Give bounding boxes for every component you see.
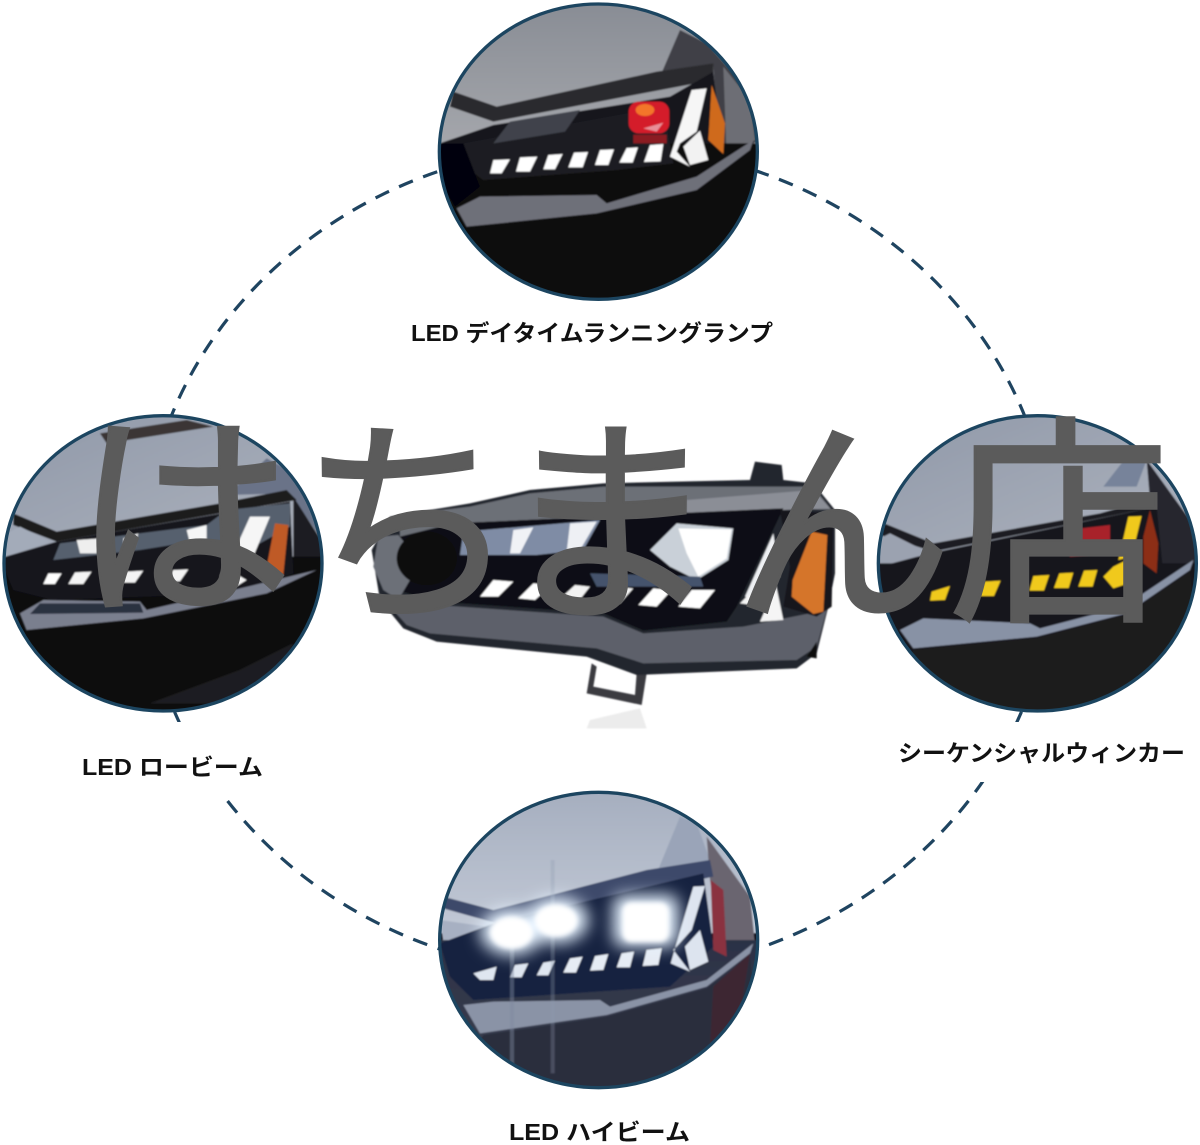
photo: bottom circle, high beam [438, 790, 760, 1090]
label: sequential turn signal: シーケンシャルウィンカー [898, 740, 1185, 766]
watermark: はちまん店 [72, 398, 1170, 652]
photo: top circle, daytime running lamp [438, 2, 759, 301]
dashed connecting ring [143, 145, 1053, 975]
photo: centre headlight [372, 462, 835, 728]
mounting bracket [587, 663, 647, 705]
amber marker [267, 523, 288, 575]
photo: right circle, sequential turn signal [876, 414, 1198, 713]
label: low beam: LED ロービーム [82, 754, 263, 780]
amber side marker [792, 532, 827, 614]
label: high beam: LED ハイビーム [509, 1119, 690, 1145]
label: daytime running lamp: LED デイタイムランニングランプ [411, 320, 773, 346]
photo: left circle, low beam [2, 414, 324, 713]
red projector [629, 102, 669, 133]
